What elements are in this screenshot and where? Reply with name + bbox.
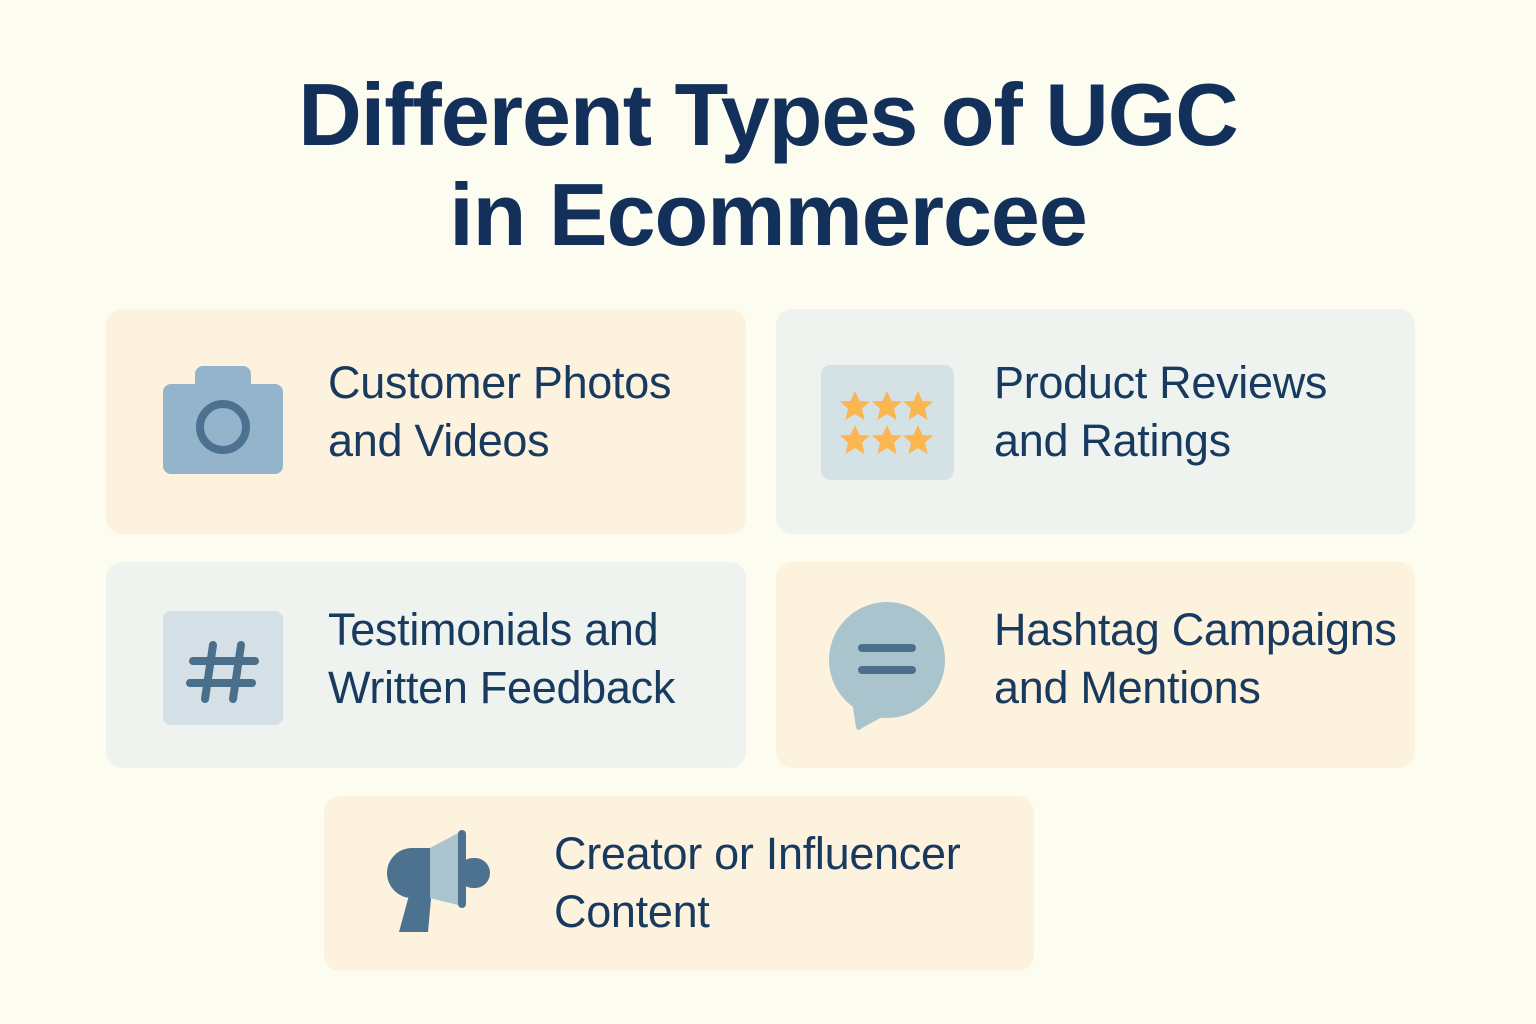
text xyxy=(328,604,676,713)
text xyxy=(994,604,1397,713)
icon: hashtag xyxy=(163,611,283,725)
panel: testimonials xyxy=(106,562,746,768)
text: and Ratings xyxy=(994,415,1231,466)
icon: stars xyxy=(821,365,954,480)
text: Written Feedback xyxy=(328,662,675,713)
text xyxy=(328,357,671,466)
text: and Videos xyxy=(328,415,549,466)
text xyxy=(554,828,960,937)
panel: creator content xyxy=(324,796,1034,971)
text: Customer Photos xyxy=(328,357,671,408)
text xyxy=(994,357,1327,466)
text: Hashtag Campaigns xyxy=(994,604,1397,655)
text: Testimonials and xyxy=(328,604,658,655)
title: Different Types of UGC xyxy=(298,65,1238,164)
text: Content xyxy=(554,886,710,937)
icon: camera xyxy=(163,366,283,474)
panel: product reviews xyxy=(776,309,1415,534)
text: and Mentions xyxy=(994,662,1261,713)
panel: customer photos xyxy=(106,309,746,534)
panel: hashtag campaigns xyxy=(776,562,1415,768)
text: Product Reviews xyxy=(994,357,1327,408)
title xyxy=(298,65,1238,264)
icon: chat bubble xyxy=(829,602,945,730)
title: in Ecommercee xyxy=(449,165,1087,264)
icon: megaphone xyxy=(387,830,490,932)
text: Creator or Influencer xyxy=(554,828,960,879)
